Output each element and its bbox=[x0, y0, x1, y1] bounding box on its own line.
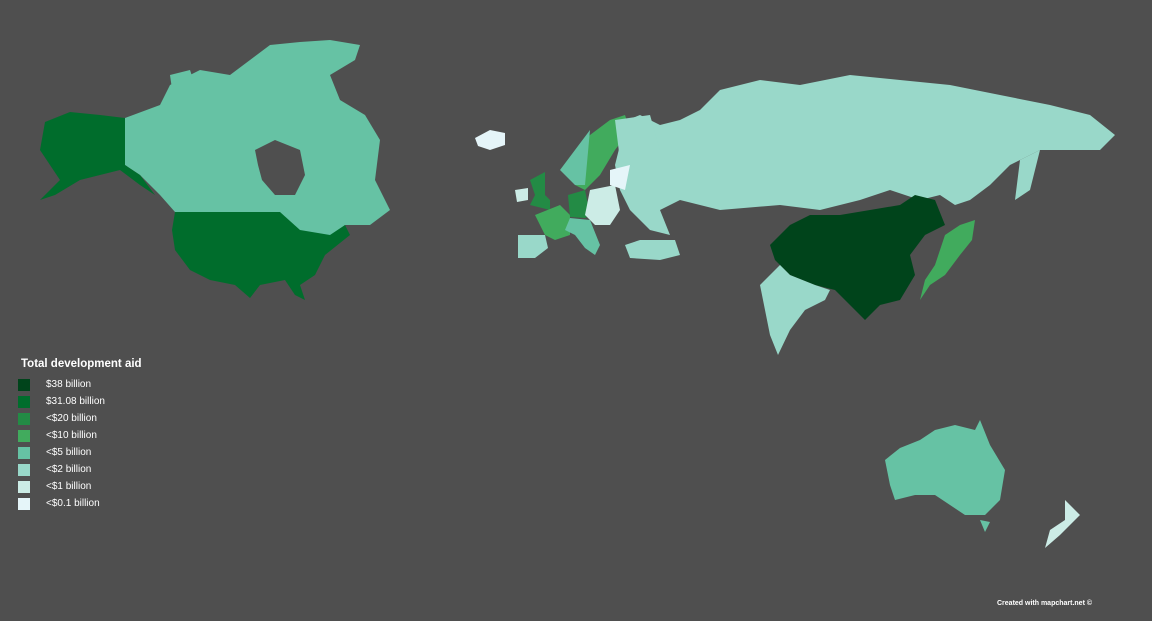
country: Italy bbox=[565, 218, 600, 255]
legend: <$2 billion bbox=[46, 464, 91, 475]
country: Alaska bbox=[40, 112, 155, 200]
legend: <$1 billion bbox=[46, 481, 91, 492]
country: Scandinavia bbox=[565, 115, 630, 190]
country: Turkey bbox=[625, 240, 680, 260]
country: Japan bbox=[920, 220, 975, 300]
Hudson Bay bbox=[255, 140, 305, 195]
legend: $38 billion bbox=[46, 379, 91, 390]
legend: $31.08 billion bbox=[46, 396, 105, 407]
country: Poland/Eastern Europe bbox=[585, 185, 620, 225]
country: Kamchatka region bbox=[1015, 150, 1040, 200]
country: France bbox=[535, 205, 570, 240]
legend: <$10 billion bbox=[46, 430, 97, 441]
country: Baltics bbox=[610, 165, 630, 190]
country: Iceland bbox=[475, 130, 505, 150]
country: Germany bbox=[568, 190, 590, 218]
country: USA bbox=[172, 212, 350, 300]
country: Spain bbox=[518, 235, 548, 258]
credit: Created with mapchart.net © bbox=[997, 600, 1092, 607]
legend: <$0.1 billion bbox=[46, 498, 100, 509]
country: India bbox=[760, 265, 830, 355]
legend: Total development aid bbox=[21, 358, 142, 370]
legend: <$20 billion bbox=[46, 413, 97, 424]
country: UK bbox=[530, 172, 550, 210]
country: Australia bbox=[885, 420, 1005, 515]
country: Canada bbox=[125, 40, 390, 240]
country: Russia bbox=[615, 75, 1115, 235]
country: Ireland bbox=[515, 188, 528, 202]
legend: <$5 billion bbox=[46, 447, 91, 458]
country: China bbox=[770, 195, 945, 320]
country: Finland bbox=[615, 115, 660, 170]
legend bbox=[18, 358, 142, 510]
country: New Zealand bbox=[1045, 500, 1080, 548]
